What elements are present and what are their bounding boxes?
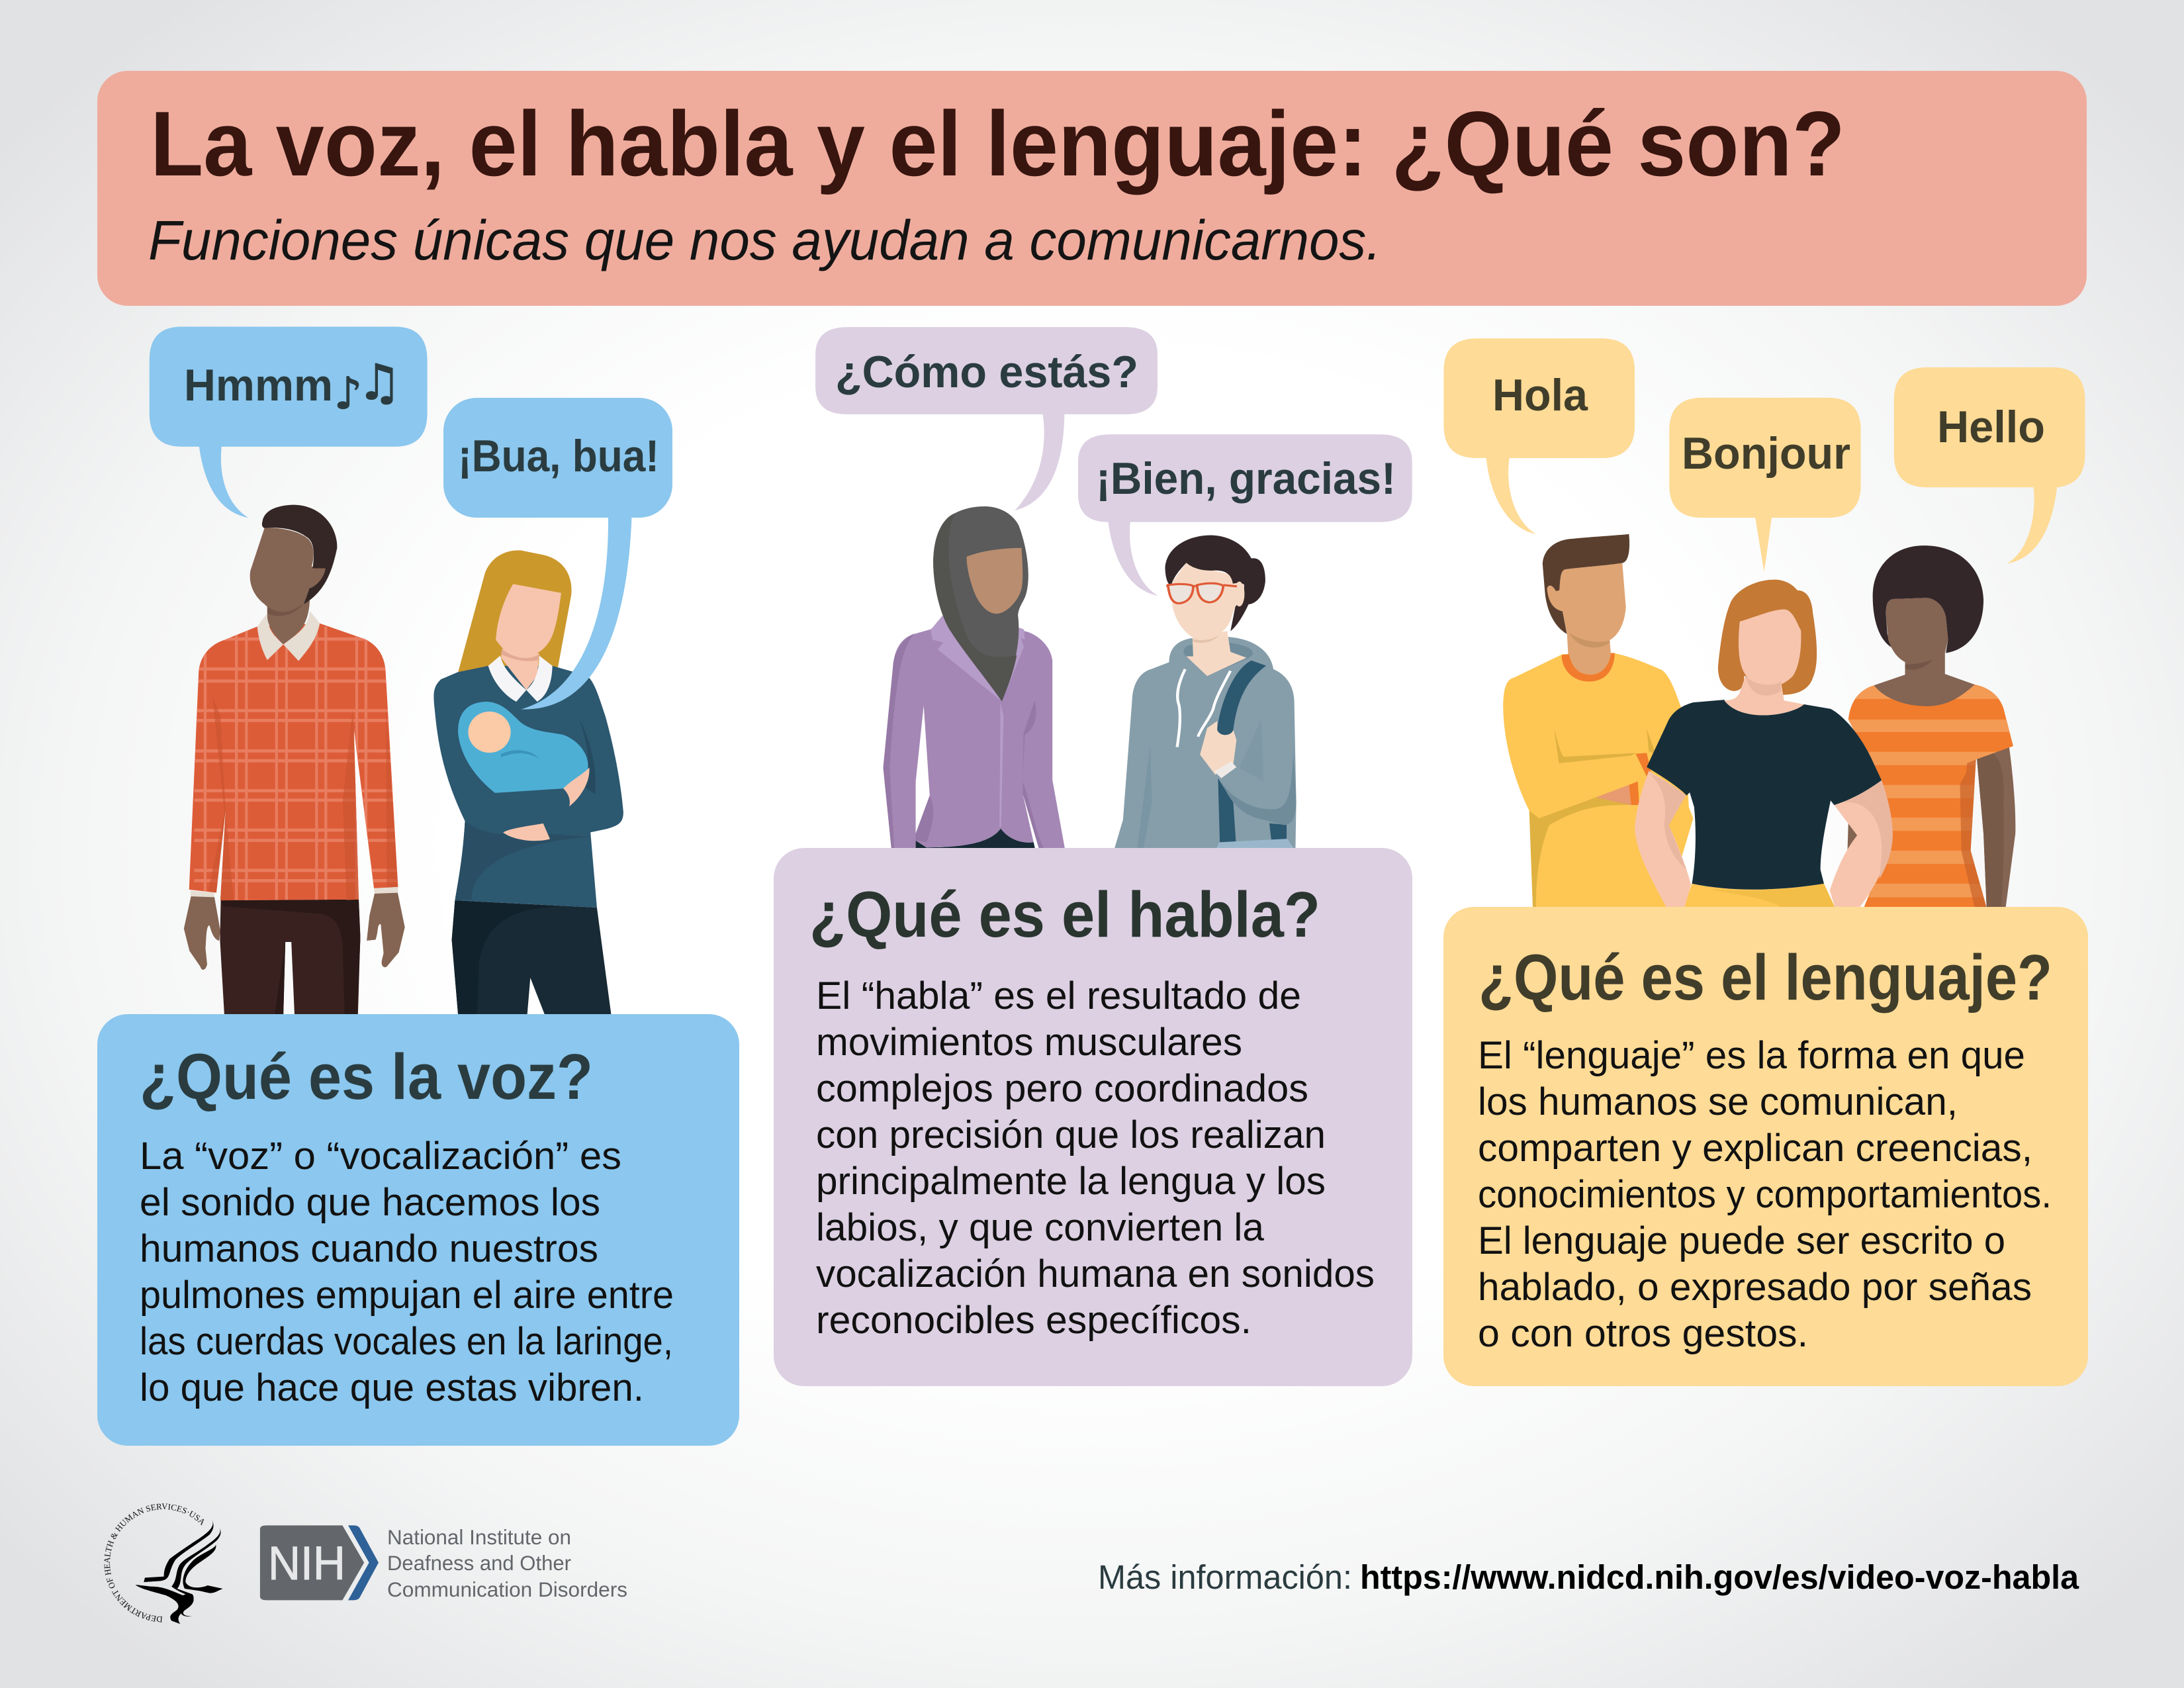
speech bubble: Bonjour: Bonjour — [1682, 428, 1850, 479]
text block: lenguaje: comparten y explican creencias, — [1478, 1127, 2032, 1170]
heading: habla: ¿Qué es el habla? — [809, 878, 1320, 951]
text block: voz: las cuerdas vocales en la laringe, — [140, 1320, 673, 1363]
speech bubble: Hello — [1894, 367, 2085, 564]
speech bubble: Hmmm — [150, 327, 428, 518]
text block: habla: reconocibles específicos. — [816, 1299, 1251, 1342]
text block: habla: movimientos musculares — [816, 1021, 1242, 1064]
woman in striped shirt — [1844, 545, 2021, 908]
heading: lenguaje: ¿Qué es el lenguaje? — [1479, 941, 2052, 1013]
text block: voz: el sonido que hacemos los — [140, 1181, 600, 1224]
figure group: language — [1503, 534, 2021, 908]
icon: music note single: ♪ — [334, 368, 362, 419]
speech bubble: Hola: Hola — [1492, 370, 1588, 420]
text block: voz: pulmones empujan el aire entre — [140, 1274, 674, 1317]
more information link: Más información: — [1098, 1558, 1352, 1596]
text block: habla: complejos pero coordinados — [816, 1067, 1308, 1110]
heading: voz: ¿Qué es la voz? — [140, 1041, 593, 1113]
header panel — [97, 71, 2087, 306]
text block: lenguaje — [1478, 1034, 2052, 1355]
text block: voz — [140, 1135, 674, 1409]
text block: habla: El “habla” es el resultado de — [816, 974, 1301, 1017]
man in plaid sweater — [184, 505, 405, 1016]
icon: music notes double: ♫ — [357, 354, 401, 411]
logo: NIH — [260, 1525, 379, 1600]
speech bubble: Como estas: ¿Cómo estás? — [835, 347, 1138, 397]
text block: voz: humanos cuando nuestros — [140, 1227, 598, 1270]
text block: lenguaje: El lenguaje puede ser escrito o — [1478, 1219, 2005, 1262]
text block: habla: con precisión que los realizan — [816, 1113, 1326, 1156]
woman holding baby — [433, 550, 623, 1016]
text block: lenguaje: los humanos se comunican, — [1478, 1080, 1958, 1123]
more information link: https://www.nidcd.nih.gov/es/video-voz-habla — [1360, 1558, 2079, 1596]
text block: institute name: Communication Disorders — [387, 1577, 627, 1601]
text block: institute name — [387, 1525, 627, 1601]
woman with glasses and hoodie — [1114, 535, 1297, 851]
speech bubble: Bien gracias — [1078, 434, 1412, 596]
glasses — [1166, 583, 1237, 603]
man in yellow shirt — [1503, 534, 1693, 908]
text block: lenguaje: hablado, o expresado por señas — [1478, 1266, 2032, 1309]
title: La voz, el habla y el lenguaje: ¿Qué son? — [150, 93, 1845, 195]
baby — [458, 702, 588, 793]
speech bubble: Como estas — [815, 327, 1158, 510]
logo: HHS seal: DEPARTMENT OF HEALTH & HUMAN SERVICES·USA — [105, 1503, 204, 1622]
text block: habla: vocalización humana en sonidos — [816, 1252, 1375, 1295]
text block: lenguaje: o con otros gestos. — [1478, 1312, 1808, 1355]
speech bubble: Bua bua — [443, 398, 672, 518]
text block: habla: principalmente la lengua y los — [816, 1160, 1326, 1203]
speech bubble: Bonjour — [1669, 398, 1861, 572]
woman in dark shirt — [1635, 580, 1893, 908]
speech bubble: Hmmm: Hmmm — [184, 360, 333, 410]
text block: habla: labios, y que convierten la — [816, 1206, 1265, 1249]
figure group: speech — [884, 506, 1297, 851]
woman in hijab — [884, 506, 1066, 851]
subtitle: Funciones únicas que nos ayudan a comunicarnos. — [148, 209, 1381, 271]
figure group: voice — [184, 505, 632, 1016]
speech bubble: Bien gracias: ¡Bien, gracias! — [1096, 453, 1396, 504]
text block: habla — [816, 974, 1375, 1342]
text block: lenguaje: El “lenguaje” es la forma en que — [1478, 1034, 2025, 1077]
speech bubble: Bua bua: ¡Bua, bua! — [458, 431, 659, 481]
text block: institute name: National Institute on — [387, 1525, 571, 1549]
text block: voz: lo que hace que estas vibren. — [140, 1366, 644, 1409]
speech bubble: Hello: Hello — [1937, 402, 2045, 452]
speech bubble: Bua tail shape — [521, 514, 632, 710]
text block: voz: La “voz” o “vocalización” es — [140, 1135, 621, 1178]
panel: que es el habla — [774, 848, 1412, 1386]
text block: institute name: Deafness and Other — [387, 1551, 571, 1575]
logo: NIH: NIH — [268, 1538, 345, 1590]
panel: que es el lenguaje — [1443, 907, 2088, 1386]
speech bubble: Hola — [1443, 338, 1635, 534]
panel: que es la voz — [97, 1014, 739, 1446]
text block: lenguaje: conocimientos y comportamientos. — [1478, 1173, 2052, 1216]
